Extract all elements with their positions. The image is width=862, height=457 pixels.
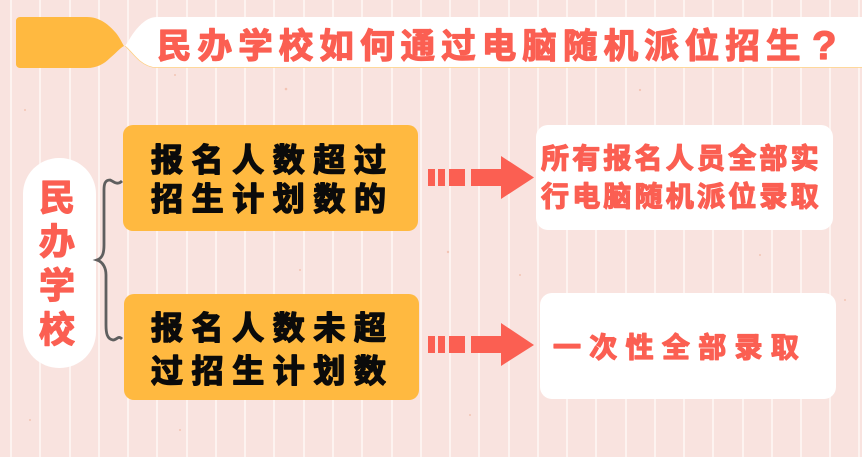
school label text: 办 xyxy=(39,221,75,262)
condition text: 报名人数未超 xyxy=(151,310,395,346)
banner underline xyxy=(125,46,862,68)
school label text: 民 xyxy=(39,177,75,218)
panel: under quota condition xyxy=(124,294,419,400)
school label text: 学 xyxy=(39,265,75,306)
arrow: top xyxy=(428,156,534,199)
panel: over quota condition xyxy=(123,125,418,231)
condition text xyxy=(151,310,395,389)
title banner xyxy=(16,17,862,68)
banner white ribbon xyxy=(125,17,862,68)
school label text: 校 xyxy=(39,309,75,350)
condition text xyxy=(151,142,395,217)
result text: 一次性全部录取 xyxy=(553,332,807,363)
arrow: bottom xyxy=(428,323,534,366)
banner orange tab xyxy=(16,17,124,68)
result text xyxy=(541,143,822,212)
condition text: 报名人数超过 xyxy=(151,142,395,178)
school label text xyxy=(39,177,75,350)
title text: 民办学校如何通过电脑随机派位招生 xyxy=(157,28,807,66)
panel: result random allocation xyxy=(536,125,833,230)
panel: school label xyxy=(23,158,96,368)
title text: ? xyxy=(812,24,843,68)
curly bracket xyxy=(97,180,122,340)
panel: result direct admission xyxy=(540,293,836,399)
condition text: 过招生计划数 xyxy=(151,353,395,389)
result text: 行电脑随机派位录取 xyxy=(541,180,822,212)
result text: 所有报名人员全部实 xyxy=(541,143,822,174)
condition text: 招生计划数的 xyxy=(151,181,395,217)
